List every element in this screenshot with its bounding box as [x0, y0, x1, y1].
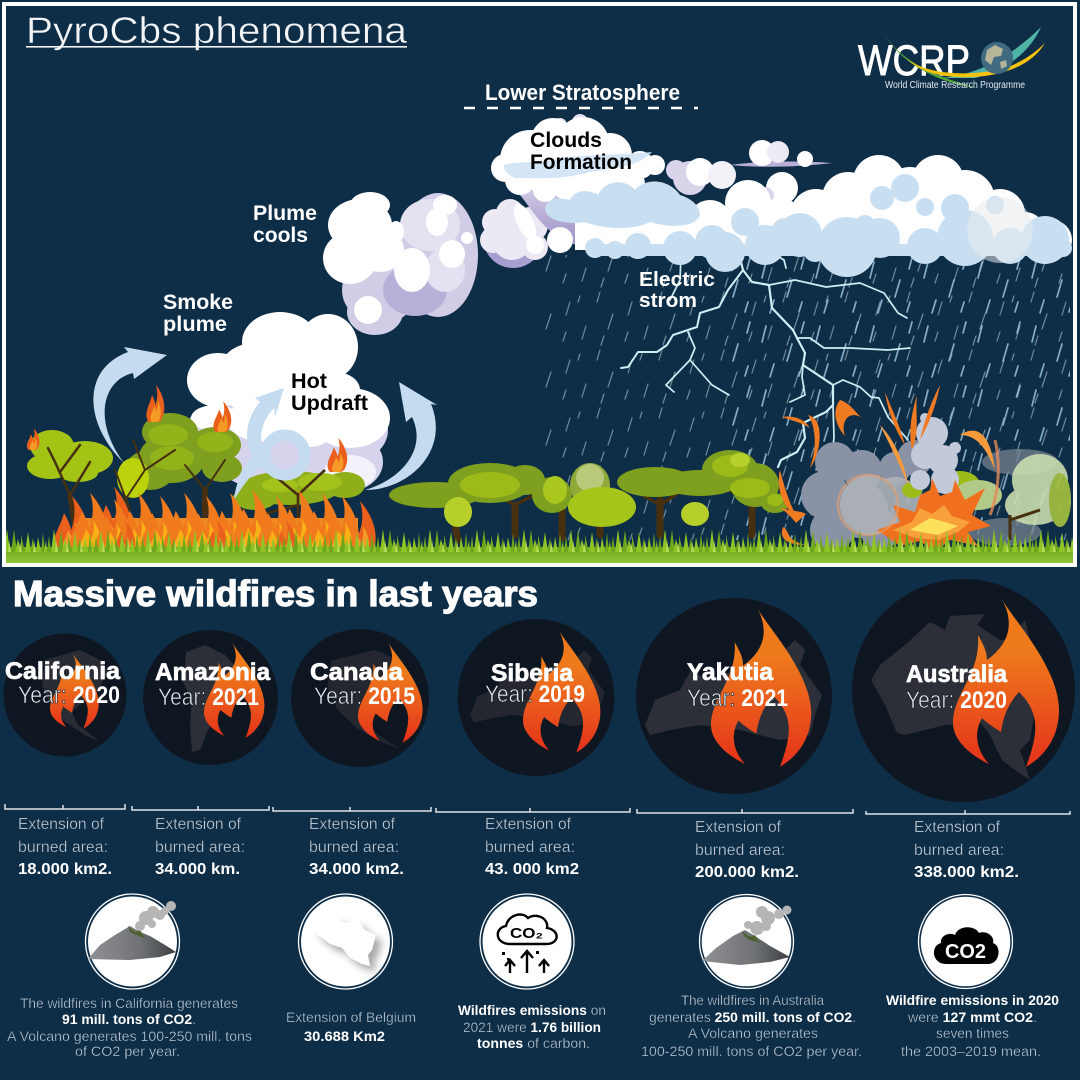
item: California: Year: 2020 [18, 682, 120, 709]
item: Canada: Year: 2015 [314, 683, 415, 710]
text: emissions 2020: the 2003–2019 mean. [901, 1043, 1041, 1059]
text: Australia CO2: 100-250 mill. tons of CO2 per year. [641, 1043, 862, 1059]
item: Canada [273, 629, 431, 878]
label: Plume cools: Plume [253, 202, 317, 225]
burned area text: 338.000 km2. [914, 864, 1019, 881]
heading: PyroCbs phenomena: PyroCbs phenomena [26, 10, 407, 51]
text: Belgium: Extension of Belgium [286, 1009, 416, 1025]
icon: volcano California [86, 894, 180, 989]
burned area text: burned area: [18, 839, 108, 856]
text: California CO2: of CO2 per year. [75, 1043, 180, 1059]
item: Australia [852, 579, 1075, 881]
burned area text: Extension of [485, 816, 572, 833]
burned area text: 43. 000 km2 [485, 861, 579, 878]
text: California CO2: A Volcano generates 100-250 mill. tons [7, 1028, 252, 1044]
item: Siberia: Year: 2019 [485, 681, 585, 708]
icon: CO2 cloud with arrows [480, 894, 574, 989]
burned area text [155, 816, 245, 878]
icon: volcano Australia [700, 894, 794, 988]
bracket [637, 809, 853, 813]
text: emissions 2021: tonnes of carbon. [477, 1035, 590, 1051]
icon: Belgium map [298, 894, 392, 989]
cloud: clouds formation [491, 114, 665, 245]
text: Australia CO2: generates 250 mill. tons of CO2. [649, 1009, 856, 1025]
burned area text: 200.000 km2. [695, 864, 799, 881]
trees: burning forest [27, 413, 365, 525]
label: Hot Updraft: Updraft [291, 392, 368, 415]
arrow: hot updraft spiral [234, 388, 305, 500]
label: Electric strom [639, 269, 715, 312]
bracket [436, 808, 630, 812]
explosion: lightning strike fire [779, 385, 1071, 552]
panel: PyroCbs scene [4, 4, 1075, 565]
label: Clouds Formation [530, 129, 632, 174]
cloud: smoke plume [187, 312, 390, 492]
item: Yakutia [636, 598, 853, 881]
item: Australia: Australia [906, 661, 1008, 688]
burned area text: Extension of [155, 816, 242, 833]
flames: wildfire [27, 385, 376, 560]
burned area text [695, 819, 799, 881]
bracket [866, 810, 1070, 814]
item: Amazonia: Year: 2021 [158, 684, 259, 711]
text: emissions 2020: Wildfire emissions in 2020 [886, 992, 1059, 1008]
item: Siberia [436, 619, 630, 878]
burned area text: 34.000 km2. [309, 861, 404, 878]
text: emissions 2021: 2021 were 1.76 billion [463, 1019, 601, 1035]
text: emissions 2021 [458, 1002, 606, 1051]
icon: CO2 black cloud: CO2 [945, 941, 986, 963]
cloud: plume cools [323, 192, 478, 335]
bracket [132, 806, 269, 810]
label: Plume cools [253, 202, 317, 247]
burned area text: burned area: [309, 839, 399, 856]
text: California CO2: 91 mill. tons of CO2. [62, 1011, 196, 1027]
burned area text [914, 819, 1019, 881]
burned area text: Extension of [18, 816, 105, 833]
burned area text: 34.000 km. [155, 861, 240, 878]
arrow: right updraft [365, 382, 437, 490]
label: Smoke plume: plume [163, 313, 227, 336]
burned area text: burned area: [155, 839, 245, 856]
text: Belgium [286, 1009, 416, 1044]
lightning [621, 248, 910, 470]
item: Amazonia: Amazonia [155, 659, 271, 686]
logo: WCRP: WCRP [858, 37, 970, 85]
label: Clouds Formation: Formation [530, 151, 632, 174]
burned area text: Extension of [309, 816, 396, 833]
item: Australia: Year: 2020 [906, 687, 1007, 714]
text: Australia CO2 [641, 992, 862, 1059]
label: Hot Updraft [291, 370, 368, 415]
label: Smoke plume: Smoke [163, 291, 233, 314]
text: emissions 2020: seven times [936, 1025, 1009, 1041]
burned area text [485, 816, 579, 878]
burned area text: burned area: [914, 842, 1004, 859]
rain [545, 255, 1070, 540]
label: Electric strom: Electric [639, 269, 715, 291]
cloud: small purple cloud [480, 199, 548, 268]
icon: CO2 cloud with arrows: CO₂ [510, 925, 543, 942]
cloud: storm cloud [526, 155, 1072, 277]
text: California CO2 [7, 995, 252, 1059]
arrow: left updraft [93, 347, 167, 463]
item: Canada: Canada [310, 659, 404, 686]
label: Electric strom: strom [639, 290, 697, 312]
label: Clouds Formation: Clouds [530, 129, 602, 152]
text: Australia CO2: The wildfires in Australia [681, 992, 824, 1008]
text: California CO2: The wildfires in California generates [20, 995, 238, 1011]
logo: WCRP [858, 23, 1045, 91]
item: California [4, 634, 126, 878]
label: Lower Stratosphere: Lower Stratosphere [485, 80, 680, 105]
grass [6, 530, 1074, 563]
label: Hot Updraft: Hot [291, 370, 327, 393]
burned area text: burned area: [485, 839, 575, 856]
item: Yakutia: Yakutia [687, 659, 774, 686]
burned area text [18, 816, 112, 878]
trees: central forest [389, 450, 789, 540]
burned area text [309, 816, 404, 878]
text: emissions 2020 [886, 992, 1059, 1059]
logo: WCRP: World Climate Research Programme [885, 80, 1025, 91]
text: Australia CO2: A Volcano generates [688, 1025, 818, 1041]
item: Siberia: Siberia [491, 660, 574, 687]
item: Amazonia [132, 630, 278, 878]
burned area text: Extension of [695, 819, 782, 836]
bracket [273, 807, 431, 811]
text: emissions 2021: Wildfires emissions on [458, 1002, 606, 1018]
cloud: small puffs [666, 140, 832, 210]
label: Plume cools: cools [253, 224, 308, 247]
text: emissions 2020: were 127 mmt CO2. [907, 1009, 1037, 1025]
burned area text: Extension of [914, 819, 1001, 836]
text: Belgium: 30.688 Km2 [304, 1028, 385, 1044]
bracket [5, 804, 125, 809]
frame [4, 4, 1075, 565]
burned area text: 18.000 km2. [18, 861, 112, 878]
label: Smoke plume [163, 291, 233, 336]
heading: Massive wildfires in last years: Massive wildfires in last years [13, 573, 538, 614]
item: California: California [5, 658, 121, 685]
burned area text: burned area: [695, 842, 785, 859]
icon: CO2 black cloud [918, 894, 1012, 988]
item: Yakutia: Year: 2021 [687, 685, 788, 712]
